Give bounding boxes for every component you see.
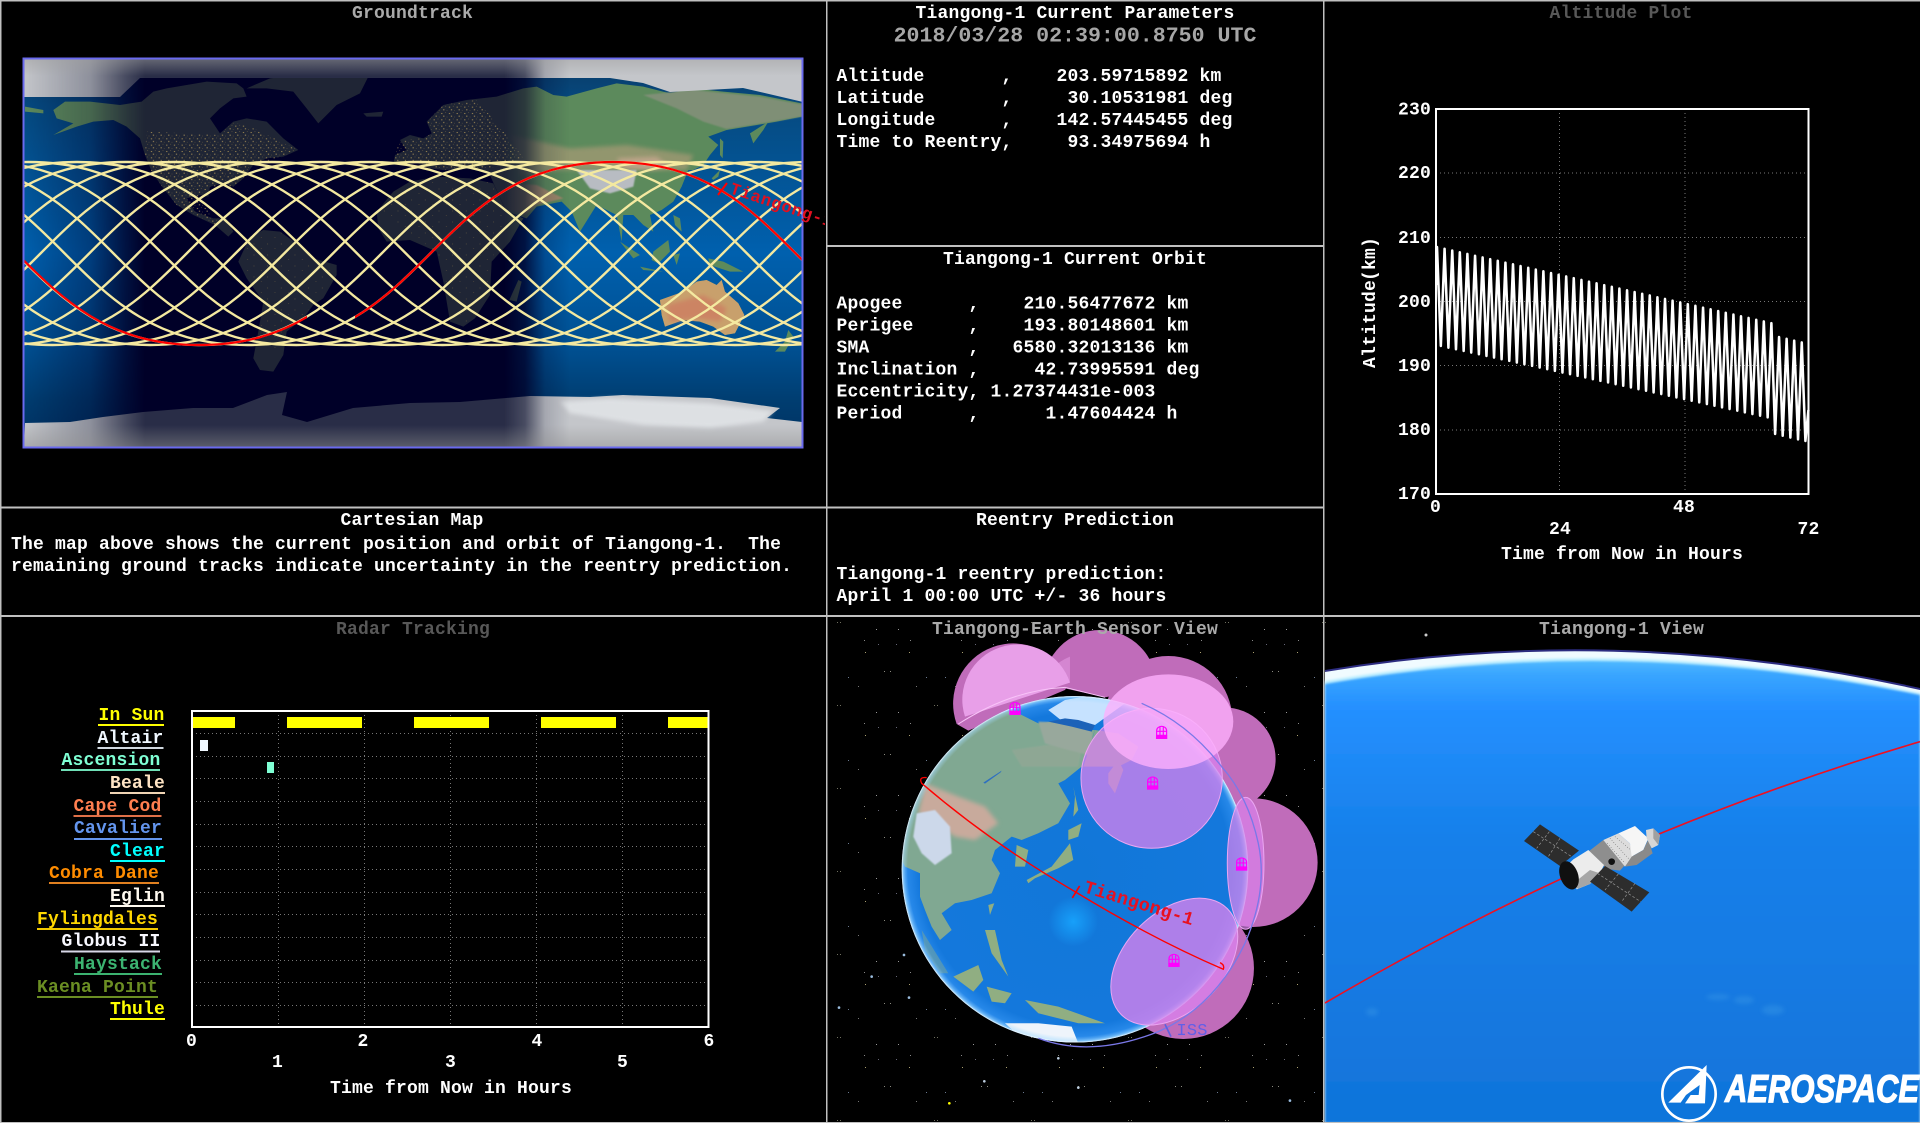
logo mark: [1662, 1065, 1716, 1121]
sensor view globe scene: [900, 630, 1318, 1050]
y axis labels: 170: [1398, 485, 1431, 505]
sensor labels: Altair: [98, 729, 164, 749]
map: cartesian earth with ground tracks: [22, 58, 825, 448]
ISS ring upper arc: [958, 687, 1105, 724]
yellow uncertainty ground tracks: [24, 160, 802, 346]
sensor labels: Globus II: [62, 932, 161, 952]
parameter values: Time to Reentry, 93.34975694 h: [836, 133, 1211, 153]
description: The map above shows the current position and orbit of Tiangong-1. The: [11, 535, 781, 555]
Altair pass: [200, 740, 208, 751]
x axis labels: 6: [703, 1032, 715, 1052]
x axis labels: 3: [445, 1053, 456, 1073]
panel: groundtrack: [22, 4, 825, 448]
altitude line chart: [1361, 100, 1820, 565]
y axis labels: 200: [1398, 293, 1431, 313]
title: current parameters: Tiangong-1 Current Parameters: [915, 4, 1235, 24]
label: Tiangong-1: Tiangong-1: [1081, 878, 1196, 931]
title: current orbit: Tiangong-1 Current Orbit: [943, 250, 1207, 270]
red current orbit track: [24, 160, 802, 346]
x axis labels: 48: [1673, 498, 1695, 518]
orbit values: Inclination , 42.73995591 deg: [836, 360, 1200, 380]
parameter values: Latitude , 30.10531981 deg: [836, 89, 1233, 109]
Ascension pass: [267, 762, 274, 773]
label: ISS: ISS: [1176, 1022, 1208, 1041]
x axis labels: [1430, 498, 1820, 540]
x axis labels: 1: [272, 1053, 283, 1073]
x axis labels: 72: [1797, 520, 1820, 540]
sensor labels: Beale: [110, 774, 165, 794]
sensor labels: Thule: [110, 1000, 165, 1020]
Tiangong orbit line: [1325, 742, 1920, 1003]
earth globe: [900, 693, 1248, 1043]
Tiangong orbit line: [921, 778, 1224, 969]
y axis title: (km): [1361, 237, 1381, 281]
map border: [24, 58, 802, 448]
panel: Tiangong-1 view: [1325, 620, 1920, 1123]
reentry text: Tiangong-1 reentry prediction:: [836, 565, 1167, 585]
marker: Tiangong-1 position: [718, 183, 727, 195]
ISS orbit ring: [1038, 703, 1261, 1047]
y axis labels: [1398, 100, 1431, 505]
x axis labels: 24: [1549, 520, 1571, 540]
y axis labels: 220: [1398, 164, 1431, 184]
sensor labels: Cavalier: [74, 819, 162, 839]
panel: radar tracking: [37, 620, 715, 1099]
x axis labels: 2: [357, 1032, 369, 1052]
x axis labels: 5: [617, 1053, 628, 1073]
orbit values: Eccentricity, 1.27374431e-003: [836, 382, 1156, 402]
station body: [1556, 826, 1660, 892]
x axis title: Time from Now in Hours: [330, 1079, 572, 1099]
earth limb and blue atmosphere: [1325, 634, 1920, 1123]
orbit values: SMA , 6580.32013136 km: [836, 338, 1189, 358]
starfield: [828, 617, 1335, 1122]
orbit values: Perigee , 193.80148601 km: [836, 316, 1189, 336]
plot frame: [192, 711, 708, 1027]
x axis title: Time from Now in Hours: [1501, 545, 1743, 565]
sensor labels: Fylingdales: [37, 910, 158, 930]
orbit values: Apogee , 210.56477672 km: [836, 294, 1189, 314]
solar panel: [1590, 866, 1649, 912]
sensor labels: Cobra Dane: [49, 864, 159, 884]
orbit values: [836, 294, 1200, 424]
sensor labels: In Sun: [98, 706, 165, 726]
panel: current orbit: [836, 250, 1207, 424]
x axis labels: [186, 1032, 715, 1073]
y axis labels: 180: [1398, 421, 1431, 441]
outer sensor domes: [953, 630, 1318, 1039]
altitude series: [1437, 247, 1808, 441]
sensor labels: Ascension: [62, 751, 161, 771]
x axis labels: 0: [186, 1032, 197, 1052]
sensor labels: Haystack: [74, 955, 162, 975]
sensor footprints on earth: [1081, 674, 1264, 1050]
panel: altitude plot: [1361, 4, 1820, 565]
radar access timeline chart: [37, 706, 715, 1099]
x axis labels: 0: [1430, 498, 1441, 518]
solar panel: [1524, 824, 1579, 866]
description: [11, 535, 792, 577]
y axis labels: 190: [1398, 357, 1431, 377]
title: cartesian map: Cartesian Map: [340, 511, 484, 531]
panel: current parameters: [836, 4, 1256, 153]
sensor labels: [37, 706, 165, 1020]
parameter values: Longitude , 142.57445455 deg: [836, 111, 1233, 131]
x axis labels: 4: [531, 1032, 543, 1052]
title: Tiangong-1 view: Tiangong-1 View: [1539, 620, 1704, 640]
title: sensor view: Tiangong-Earth Sensor View: [932, 620, 1218, 640]
title: radar tracking: Radar Tracking: [336, 620, 490, 640]
description: remaining ground tracks indicate uncertainty in the reentry prediction.: [11, 557, 792, 577]
label: Tiangong-1: Tiangong-1: [727, 181, 836, 233]
sensor labels: Clear: [110, 842, 165, 862]
logo: Aerospace: [1662, 1065, 1920, 1121]
panel: reentry prediction: [836, 511, 1174, 607]
faint clouds: [1366, 994, 1784, 1016]
title: groundtrack: Groundtrack: [352, 4, 473, 24]
sensor labels: Kaena Point: [37, 978, 158, 998]
y axis labels: 210: [1398, 229, 1431, 249]
plot frame: [1436, 109, 1808, 494]
orbit values: Period , 1.47604424 h: [836, 404, 1178, 424]
title: altitude plot: Altitude Plot: [1549, 4, 1693, 24]
panel: cartesian map text: [11, 511, 792, 577]
timestamp: 2018/03/28 02:39:00.8750 UTC: [894, 24, 1256, 48]
sensor labels: Eglin: [110, 887, 165, 907]
sensor labels: Cape Cod: [74, 797, 162, 817]
spacecraft model: [1524, 824, 1660, 912]
panel: Tiangong-Earth sensor view: [828, 617, 1335, 1122]
inner dome highlight: [962, 645, 1070, 717]
radar site icons: [1009, 702, 1247, 967]
reentry text: April 1 00:00 UTC +/- 36 hours: [836, 587, 1167, 607]
title: reentry prediction: Reentry Prediction: [976, 511, 1174, 531]
reentry text: [836, 565, 1167, 607]
parameter values: [836, 67, 1233, 153]
parameter values: Altitude , 203.59715892 km: [836, 67, 1222, 87]
y axis labels: 230: [1398, 100, 1431, 120]
ISS marker: [1165, 1024, 1171, 1037]
in-sun bars: [192, 717, 708, 728]
Tiangong marker: [1072, 886, 1080, 898]
y axis title: Altitude: [1361, 280, 1381, 368]
